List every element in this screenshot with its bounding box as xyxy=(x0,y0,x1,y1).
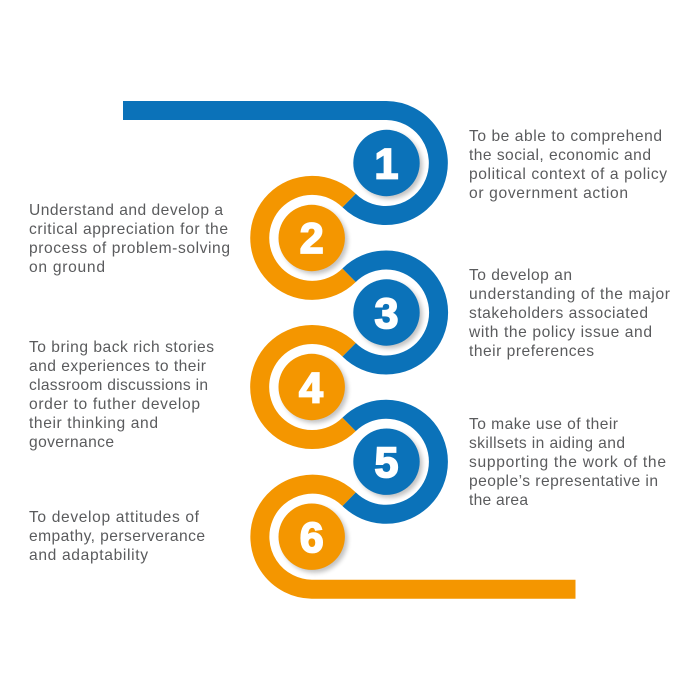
ribbon segment 2: orange xyxy=(260,185,349,290)
text block 2 xyxy=(29,202,230,276)
badge 6: 6 xyxy=(300,514,324,562)
text block 3 xyxy=(468,267,670,360)
text block 3: stakeholders associated xyxy=(469,305,648,322)
text block 4: order to futher develop xyxy=(29,396,200,413)
text block 6 xyxy=(29,509,205,564)
text block 4: classroom discussions in xyxy=(29,377,208,394)
text block 4: and experiences to their xyxy=(29,358,206,375)
text block 3: their preferences xyxy=(469,343,594,360)
badge 3: 3 xyxy=(375,290,398,338)
text block 4: To bring back rich stories xyxy=(29,339,214,356)
text block 5 xyxy=(469,416,666,509)
text block 4: governance xyxy=(29,434,114,451)
text block 5: To make use of their xyxy=(469,416,618,433)
text block 2: process of problem-solving xyxy=(29,240,230,257)
text block 1: or government action xyxy=(469,185,628,202)
ribbon segment 6: orange xyxy=(260,484,576,589)
text block 5: skillsets in aiding and xyxy=(469,435,625,452)
text block 2: Understand and develop a xyxy=(29,202,223,219)
text block 6: and adaptability xyxy=(29,547,148,564)
badge 6 xyxy=(278,504,348,573)
badge 5: 5 xyxy=(375,439,398,487)
text block 1 xyxy=(469,128,667,202)
text block 6: empathy, perserverance xyxy=(29,528,205,545)
text block 5: people’s representative in xyxy=(469,473,658,490)
badge 1: 1 xyxy=(375,140,398,188)
ribbon: winding path xyxy=(123,110,576,589)
text block 2: critical appreciation for the xyxy=(29,221,228,238)
badge 4 xyxy=(278,354,348,423)
text block 1: To be able to comprehend xyxy=(469,128,662,145)
text block 5: supporting the work of the xyxy=(469,454,666,471)
badge 4: 4 xyxy=(299,364,323,412)
text block 5: the area xyxy=(469,492,528,509)
text block 3: with the policy issue and xyxy=(468,324,652,341)
badge 2 xyxy=(278,205,348,274)
text block 1: the social, economic and xyxy=(469,147,651,164)
text block 6: To develop attitudes of xyxy=(29,509,200,526)
ribbon segment 5: blue xyxy=(349,409,438,514)
ribbon segment 1: blue xyxy=(123,110,438,215)
ribbon segment 4: orange xyxy=(260,335,349,440)
text block 4 xyxy=(29,339,214,451)
text block 2: on ground xyxy=(29,259,105,276)
text block 3: understanding of the major xyxy=(469,286,670,303)
badge 1 xyxy=(353,130,422,199)
ribbon segment 3: blue xyxy=(349,260,439,365)
text block 1: political context of a policy xyxy=(469,166,667,183)
text block 3: To develop an xyxy=(469,267,572,284)
badge 3 xyxy=(353,279,422,348)
badge 5 xyxy=(353,428,422,498)
badge 2: 2 xyxy=(300,215,324,263)
text block 4: their thinking and xyxy=(29,415,158,432)
